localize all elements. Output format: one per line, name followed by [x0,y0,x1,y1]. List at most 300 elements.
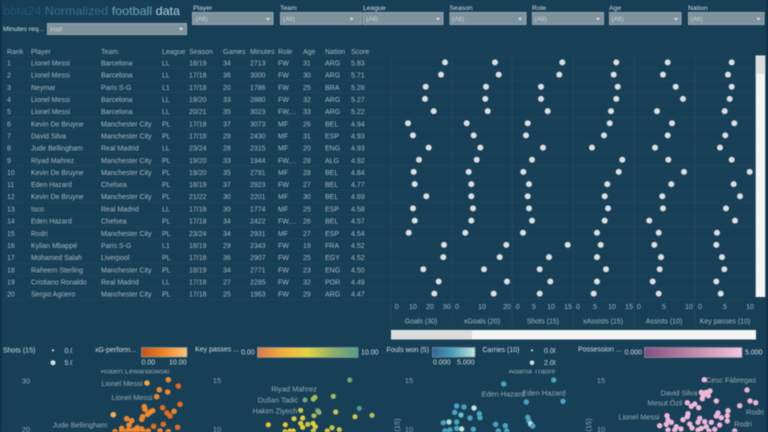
row 10: 28 [303,170,311,177]
scatter: goals vs shots (orange): Robert Lewandowski [101,366,170,376]
row 18: 4.50 [351,267,365,274]
row 14: BEL [325,219,338,226]
row 18: 2771 [250,267,266,274]
table header: Games [223,49,246,56]
scatter: possession (pink): Mesut Özil [648,398,683,408]
row 9: 33 [223,158,231,165]
legend: shots size: 0.00 [64,348,78,355]
row 13: 1774 [250,206,266,213]
row 17: PL [162,255,171,262]
row 10: Kevin De Bruyne [31,170,84,177]
row 13: 25 [303,206,311,213]
row 9: 9 [7,158,11,165]
row 13: 17/18 [189,206,207,213]
row 19: 19 [7,280,15,286]
axis tick labels: 30 [443,304,451,311]
row 13: 30 [223,206,231,213]
row 11: 37 [223,182,231,189]
row 5: Lionel Messi [31,109,70,116]
row 1: Barcelona [101,60,133,68]
scatter: possession (pink): Rodri [746,408,764,416]
scatter: possession (pink): Lionel Messi [618,412,660,422]
row 1: 1 [7,60,11,68]
axis tick labels: 10 [746,304,754,311]
axis tick labels: 15 [564,304,572,311]
row 14: 4.57 [351,219,365,226]
row 12: Kevin De Bruyne [31,194,84,201]
row 10: 2791 [250,170,266,177]
row 15 [7,231,365,238]
table: player rankings [7,49,369,299]
row 17: 17 [7,255,15,262]
row 12: 21/22 [189,194,207,201]
row 17: 25 [303,255,311,262]
row 16: 29 [223,243,231,250]
scatter: xAssists vs key passes (yellow-green): Hakim Ziyech [253,406,297,416]
row 14: PL [162,219,171,226]
legend: xG performance: 10.00 [169,360,187,366]
row 11: Chelsea [101,182,127,189]
scatter: possession (pink): Cesc Fàbregas [706,376,756,384]
axis tick labels: 10 [608,304,616,311]
row 18: Manchester City [101,267,152,274]
row 18: ENG [325,267,340,274]
row 19: 32 [303,280,311,286]
row 18: 23 [303,267,311,274]
row 1: FW [278,60,289,68]
row 6 [7,121,365,128]
row 18: PL [162,267,171,274]
row 2: Barcelona [101,73,133,80]
row 1: LL [162,60,170,68]
row 19: 4.49 [351,280,365,286]
axis titles: Key passes (10) [700,318,750,326]
row 13: Isco [31,206,44,213]
row 16: 2343 [250,243,266,250]
row 13 [7,206,365,213]
filter: role: (All) [534,16,547,23]
scatter: fouls won vs carries (blue): (15) [392,418,402,432]
row 3: 3 [7,85,11,92]
row 14: Eden Hazard [31,219,72,226]
row 7: David Silva [31,134,66,140]
filter: season [450,5,526,24]
table header: Minutes [250,49,275,56]
axis tick labels: 10 [478,304,486,311]
row 20: PL [162,292,171,299]
row 18 [7,267,365,274]
table header: Role [278,49,293,56]
row 17: 17/18 [189,255,207,262]
row 11: BEL [325,182,338,189]
legend: key passes [195,346,379,358]
legend: possession [578,346,763,358]
row 11: Eden Hazard [31,182,72,189]
row 13: 4.58 [351,206,365,213]
row 11 [7,182,365,189]
row 4: 19/20 [189,97,207,104]
filter: nation: Nation [688,5,708,12]
scatter: fouls won vs carries (blue) [392,366,566,432]
scatter: xAssists vs key passes (yellow-green): Riyad Mahrez [271,384,317,394]
row 8: 28 [223,146,231,153]
row 16: 19 [303,243,311,250]
row 9: 19/20 [189,158,207,165]
row 9: Riyad Mahrez [31,158,75,165]
row 2: 17/18 [189,73,207,80]
row 14: 14 [7,219,15,226]
row 7: PL [162,134,171,140]
row 7: 31 [303,134,311,140]
axis titles: Shots (15) [527,318,559,326]
row 8: Real Madrid [101,146,139,153]
filter: role [532,5,604,24]
row 4: ARG [325,97,340,104]
row 2: Lionel Messi [31,73,70,80]
row 20: 1963 [250,292,266,299]
legend: fouls won [386,347,475,366]
dot column: shots [520,59,571,297]
row 19: 17/18 [189,280,207,286]
filter: season: (All) [452,16,464,23]
filter: player: (All) [196,16,208,23]
table header: Rank [7,49,24,56]
row 10: 10 [7,170,15,177]
scatter: possession (pink): Rodri [734,420,752,428]
row 15: ESP [325,231,339,238]
row 9: Manchester City [101,158,152,165]
dot column: xAssists [589,59,625,297]
axis tick labels: 0 [455,304,459,311]
row 13: 13 [7,206,15,213]
row 15: MF [278,231,288,238]
table header: Season [189,49,213,56]
row 7: 29 [223,134,231,140]
legend: key passes: 10.00 [361,350,379,356]
row 8: LL [162,146,170,153]
legend: shots size [3,348,78,367]
row 2: 36 [223,73,231,80]
row 1: 34 [223,60,231,68]
row 15: 2931 [250,231,266,238]
row 7 [7,134,365,140]
row 19: 2285 [250,280,266,286]
axis tick labels: 5 [593,304,597,311]
row 15: Manchester City [101,231,152,238]
row 6: 3073 [250,121,266,128]
row 19: 27 [223,280,231,286]
row 14: Chelsea [101,219,127,226]
row 1: 5.83 [351,60,365,68]
scatter: xAssists vs key passes (yellow-green) [213,376,375,432]
row 3: 1786 [250,85,266,92]
scatter: fouls won vs carries (blue): 15 [405,376,413,385]
row 8: 2315 [250,146,266,153]
row 1 [7,60,365,68]
row 7: ESP [325,134,339,140]
row 12: 4.69 [351,194,365,201]
axis tick labels: 0 [698,304,702,311]
row 19: LL [162,280,170,286]
row 8 [7,146,365,153]
row 16: Paris S-G [101,243,131,250]
axis tick labels: 20 [503,304,511,311]
row 8: 8 [7,146,11,153]
row 20: 4.47 [351,292,365,299]
row 14: 2422 [250,219,266,226]
filter: role: Role [532,5,546,12]
row 6: 37 [223,121,231,128]
row 3: 17/18 [189,85,207,92]
row 5: 5.22 [351,109,365,116]
table header: Player [31,49,52,56]
filter: player [192,5,273,24]
row 18: 18/19 [189,267,207,274]
row 6: BEL [325,121,338,128]
row 4: 33 [223,97,231,104]
row 12: 30 [223,194,231,201]
legend: shots size: 5.00 [64,360,78,367]
row 16: 16 [7,243,15,250]
row 15: 34 [223,231,231,238]
row 12: 30 [303,194,311,201]
axis tick labels: 20 [426,304,434,311]
legend: carries size [482,347,562,367]
row 20: 20 [7,292,15,299]
row 7: Manchester City [101,134,152,140]
row 18: Raheem Sterling [31,267,83,274]
row 13: MF [278,206,288,213]
row 6: PL [162,121,171,128]
row 8: 23/24 [189,146,207,153]
row 2: 2 [7,73,11,80]
row 20: Sergio Agüero [31,292,75,299]
row 3: BRA [325,85,340,92]
filter: minutes required: Half [50,26,62,33]
row 2: 30 [303,73,311,80]
filter: minutes required [3,24,186,34]
row 10: 35 [223,170,231,177]
row 8: ENG [325,146,340,153]
filter: age [609,5,681,24]
row 4: LL [162,97,170,104]
row 15: 23/24 [189,231,207,238]
row 17: 2907 [250,255,266,262]
row 11: PL [162,182,171,189]
filter: minutes required: Minutes req... [3,26,44,33]
filter: season: Season [450,5,473,12]
row 15: PL [162,231,171,238]
axis tick labels: 0 [395,304,399,311]
row 6: Kevin De Bruyne [31,121,84,128]
axis titles [405,318,750,326]
scatter: xAssists vs key passes (yellow-green): 15 [213,376,221,385]
row 10: 19/20 [189,170,207,177]
scatter: fouls won vs carries (blue): Eden Hazard [481,390,525,398]
axis tick labels: 5 [532,304,536,311]
row 17: EGY [325,255,340,262]
row 12: PL [162,194,171,201]
row 19: Cristiano Ronaldo [31,280,87,286]
row 14: 34 [223,219,231,226]
row 3: Paris S-G [101,85,131,92]
row 12: 12 [7,194,15,201]
row 4: FW [278,97,289,104]
row 9: FW,... [278,158,296,165]
table header: League [162,49,185,56]
legend: carries size: Carries (10) [482,347,519,354]
row 20 [7,292,365,299]
row 5: 3023 [250,109,266,116]
table header: Nation [325,49,345,56]
row 8: Jude Bellingham [31,146,83,153]
row 2: 5.71 [351,73,365,80]
row 6: MF [278,121,288,128]
row 13: ESP [325,206,339,213]
row 20: FW [278,292,289,299]
axis tick labels: 0 [637,304,641,311]
row 6: 6 [7,121,11,128]
row 12 [7,194,365,201]
scatter: goals vs shots (orange): Lionel Messi [101,379,143,388]
axis titles: Goals (30) [405,318,437,326]
table header: Age [303,49,316,56]
scatter: goals vs shots (orange): 30 [22,376,30,386]
axis tick labels: 15 [625,304,633,311]
row 6: 17/18 [189,121,207,128]
row 9: PL [162,158,171,165]
row 4: 2880 [250,97,266,104]
row 13: LL [162,206,170,213]
row 4: Lionel Messi [31,97,70,104]
row 20: 17/18 [189,292,207,299]
row 8: MF [278,146,288,153]
row 5: 35 [223,109,231,116]
row 4: 32 [303,97,311,104]
row 9: ALG [325,158,339,165]
row 20: 29 [303,292,311,299]
row 11: 4.77 [351,182,365,189]
table header: Team [101,49,118,56]
filter: league: (All) [366,16,378,23]
legend: key passes: 0.00 [241,350,255,356]
row 17: FW [278,255,289,262]
legend: carries size: 2.000 [544,360,562,367]
scatter: possession (pink): (15) [584,418,593,432]
row 10: PL [162,170,171,177]
legend: xG performance [95,347,187,366]
row 11: 11 [7,182,14,189]
axis titles: xGoals (20) [464,318,500,326]
scatter: fouls won vs carries (blue): Eden Hazard [522,388,566,398]
row 7: 4.93 [351,134,365,140]
legend: xG performance: xG-perform... [95,347,136,354]
legend: shots size: Shots (15) [3,348,35,354]
row 11: 2923 [250,182,266,189]
row 20: ARG [325,292,340,299]
row 17: Mohamed Salah [31,255,82,262]
row 20: Manchester City [101,292,152,299]
row 10: MF [278,170,288,177]
dot column: assists [646,59,687,297]
row 20: 25 [223,292,231,299]
row 1: Lionel Messi [31,60,70,68]
legend: possession: 0.000 [624,350,642,356]
row 11: FW [278,182,289,189]
row 3: 5.28 [351,85,365,92]
scatter: xAssists vs key passes (yellow-green): Dušan Tadić [258,396,299,404]
row 11: 27 [303,182,311,189]
row 12: 2201 [250,194,266,201]
row 16: 4.52 [351,243,365,250]
axis titles: Assists (10) [646,318,682,326]
legend: xG performance: 0.00 [142,360,155,366]
row 14: FW,... [278,219,296,226]
row 17: Liverpool [101,255,130,262]
row 16: 18/19 [189,243,207,250]
row 13: Real Madrid [101,206,139,213]
filter: league [363,5,443,24]
row 4: Barcelona [101,97,133,104]
vertical scrollbar [756,56,765,297]
axis tick labels: 10 [685,304,693,311]
legend: possession: 5.000 [745,350,763,356]
legend: fouls won: Fouls won (5) [386,347,429,354]
row 5: Barcelona [101,109,133,116]
row 6: 26 [303,121,311,128]
filter: age: (All) [612,16,624,23]
row 15: 15 [7,231,15,238]
row 19: FW [278,280,289,286]
row 11: 18/19 [189,182,207,189]
row 15: Rodri [31,231,48,238]
row 5: FW,... [278,109,296,116]
row 17: 36 [223,255,231,262]
filter: team: Team [280,5,297,12]
row 7: 17/18 [189,134,207,140]
row 16: FRA [325,243,339,250]
row 6: Manchester City [101,121,152,128]
row 10: BEL [325,170,338,177]
row 17: 4.52 [351,255,365,262]
row 5: 33 [303,109,311,116]
legend: fouls won: 5.000 [457,360,475,366]
dot column: xGoals [462,59,510,297]
row 1: 31 [303,60,311,68]
row 5: 20/21 [189,109,207,116]
row 4: 5.27 [351,97,365,104]
row 3: FW [278,85,289,92]
row 3 [7,85,365,92]
row 2 [7,73,365,80]
filter: nation: (All) [690,16,703,23]
scatter: goals vs shots (orange) [22,366,183,432]
row 18: 34 [223,267,231,274]
row 8: 4.93 [351,146,365,153]
row 15: 27 [303,231,311,238]
row 16: FW [278,243,289,250]
row 5: ARG [325,109,340,116]
row 12: MF [278,194,288,201]
row 8: 20 [303,146,311,153]
row 14: 26 [303,219,311,226]
row 15: 4.54 [351,231,365,238]
legend: fouls won: 0.000 [433,360,451,366]
row 3: 20 [223,85,231,92]
dot column: key passes [713,59,753,297]
row 5: LL [162,109,170,116]
row 9: 28 [303,158,311,165]
